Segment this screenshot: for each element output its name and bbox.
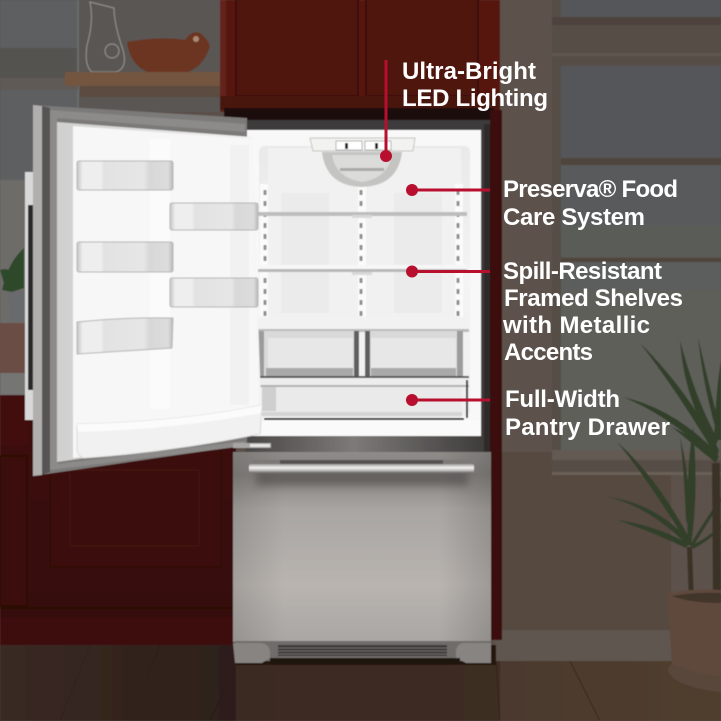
window right xyxy=(552,0,721,475)
door bin 1 xyxy=(77,161,173,190)
door bin 5 xyxy=(77,318,173,354)
upper cabinets xyxy=(220,0,500,122)
left plant and backsplash xyxy=(0,248,27,395)
vase xyxy=(86,2,124,72)
callout: LED lighting: Ultra-Bright xyxy=(402,58,536,85)
refrigerator lower drawer xyxy=(233,452,491,664)
glass shelf one xyxy=(258,212,467,218)
callout: LED lighting: LED Lighting xyxy=(402,85,548,112)
crisper drawers xyxy=(254,317,469,379)
lower left cabinets xyxy=(0,395,236,645)
plant leaves xyxy=(608,337,721,549)
fridge interior xyxy=(247,130,484,452)
callout: Preserva food care: Care System xyxy=(503,204,645,231)
base grille xyxy=(233,641,491,664)
door bin 3 xyxy=(77,242,173,272)
floor xyxy=(0,645,721,721)
background window and shelf left xyxy=(0,0,220,395)
callout: framed shelves: Framed Shelves xyxy=(504,285,683,312)
callout: framed shelves: Accents xyxy=(504,339,593,366)
wood shelf xyxy=(65,72,220,97)
side cabinet column xyxy=(490,110,502,640)
callout: framed shelves: with Metallic xyxy=(502,312,650,339)
pantry drawer xyxy=(255,376,469,418)
door frame xyxy=(33,105,247,476)
plant pot xyxy=(667,590,721,692)
callout: framed shelves xyxy=(406,258,683,366)
callout: Preserva food care: Preserva® Food xyxy=(503,176,678,203)
door hinge xyxy=(233,443,271,448)
door handle xyxy=(25,172,33,420)
right plant and pot xyxy=(608,337,721,692)
bottom door bin xyxy=(77,405,262,458)
shelf rails xyxy=(260,184,463,318)
refrigerator cabinet frame xyxy=(246,120,490,452)
door bin 2 xyxy=(170,203,258,230)
open refrigerator door xyxy=(25,105,262,476)
door bin 4 xyxy=(170,278,258,307)
drawer handle xyxy=(249,460,474,473)
glass shelf two xyxy=(258,265,467,275)
plant trunks xyxy=(687,463,721,602)
door liner xyxy=(57,122,262,462)
bowl xyxy=(127,32,210,73)
callout: Preserva food care xyxy=(406,176,678,231)
callout: pantry drawer: Full-Width xyxy=(505,386,620,413)
callout: pantry drawer: Pantry Drawer xyxy=(505,414,670,441)
LED light xyxy=(310,138,415,187)
callout: LED lighting xyxy=(380,58,548,162)
callout: pantry drawer xyxy=(406,386,670,441)
callout: framed shelves: Spill-Resistant xyxy=(503,258,662,285)
